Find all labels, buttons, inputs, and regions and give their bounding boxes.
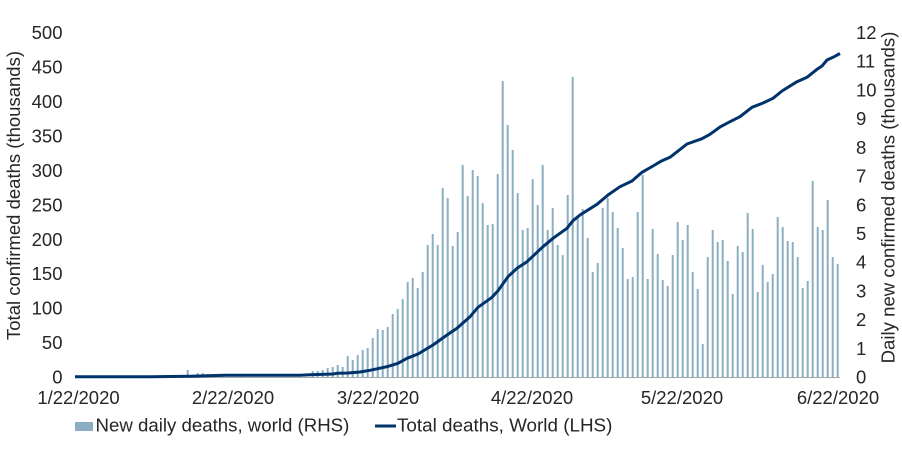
right y axis tick labels: 6	[856, 194, 866, 215]
left y axis title: Total confirmed deaths (thousands)	[3, 51, 24, 340]
left y axis tick labels	[32, 22, 62, 388]
line: total deaths, world	[75, 54, 840, 377]
right y axis tick labels: 11	[856, 51, 875, 72]
left y axis tick labels: 450	[32, 56, 62, 78]
x axis date labels: 2/22/2020	[192, 387, 274, 408]
left y axis tick labels: 500	[32, 22, 62, 43]
right y axis tick labels: 5	[856, 223, 866, 244]
left y axis tick labels: 0	[52, 367, 62, 388]
right y axis tick labels: 0	[856, 367, 866, 388]
legend: new daily deaths label: New daily deaths, world (RHS)	[96, 414, 349, 436]
left y axis tick labels: 100	[32, 298, 62, 319]
left y axis tick labels: 250	[32, 194, 62, 215]
x axis date labels: 6/22/2020	[797, 387, 879, 408]
left y axis tick labels: 200	[32, 229, 62, 250]
right y axis tick labels: 1	[856, 338, 866, 359]
legend: total deaths label: Total deaths, World (LHS)	[397, 414, 612, 436]
right y axis title: Daily new confirmed deaths (thousands)	[878, 32, 898, 363]
right y axis tick labels: 10	[856, 79, 877, 100]
legend: new daily deaths swatch	[75, 422, 93, 431]
bars: new daily deaths, world	[158, 77, 838, 377]
left y axis tick labels: 400	[32, 91, 62, 112]
right y axis tick labels: 4	[856, 252, 866, 273]
x axis date labels: 3/22/2020	[337, 387, 419, 408]
legend	[75, 414, 612, 436]
x axis baseline	[76, 376, 840, 378]
legend: total deaths swatch	[375, 424, 396, 428]
right y axis tick labels	[856, 22, 877, 388]
right y axis tick labels: 9	[856, 108, 866, 129]
right y axis tick labels: 2	[856, 309, 866, 330]
left y axis tick labels: 150	[32, 263, 62, 284]
left y axis tick labels: 300	[32, 160, 62, 181]
right y axis tick labels: 3	[856, 280, 866, 301]
left y axis tick labels: 50	[42, 332, 62, 353]
x axis date labels: 4/22/2020	[491, 387, 573, 408]
x axis date labels: 1/22/2020	[37, 387, 120, 408]
x axis date labels: 5/22/2020	[641, 387, 723, 408]
right y axis tick labels: 7	[856, 166, 866, 186]
x axis date labels	[37, 387, 879, 408]
left y axis tick labels: 350	[32, 125, 62, 146]
right y axis tick labels: 12	[856, 22, 877, 43]
right y axis tick labels: 8	[856, 137, 866, 158]
